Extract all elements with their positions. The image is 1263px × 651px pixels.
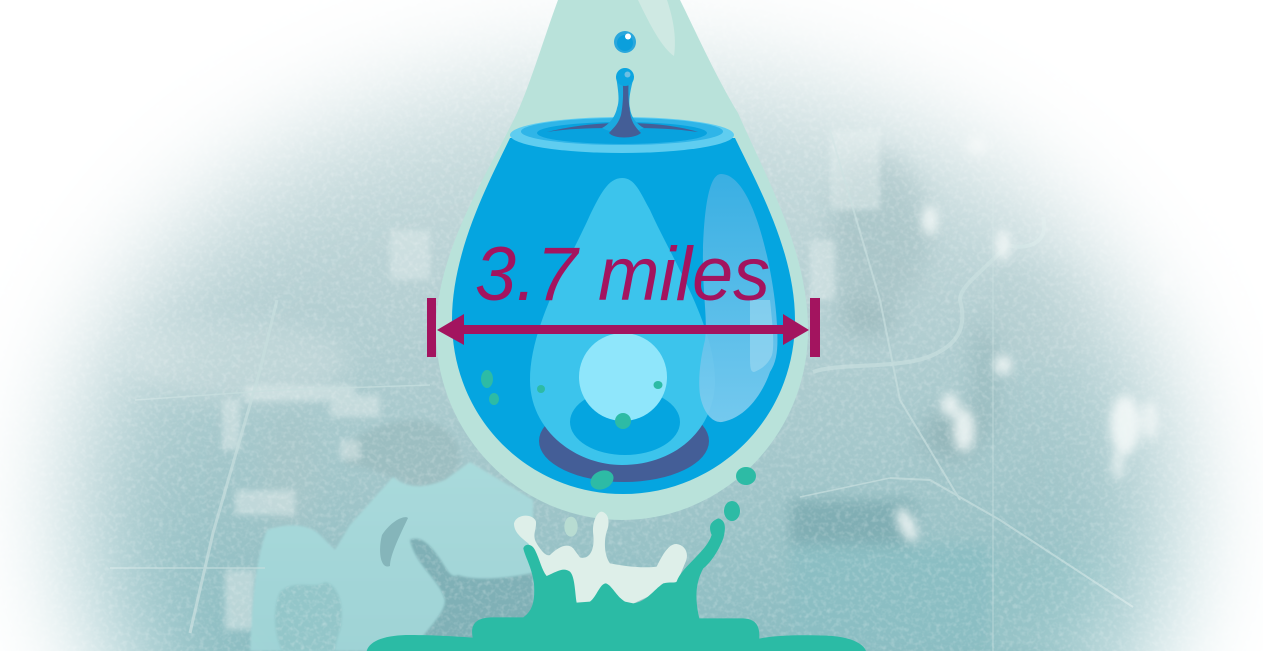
drop inner water body	[452, 138, 795, 494]
droplet	[481, 370, 493, 388]
inner blue ellipse	[570, 389, 680, 455]
droplet	[537, 385, 545, 393]
land lobe	[358, 422, 457, 482]
fields lower right	[786, 496, 1054, 646]
falling droplet inner	[617, 35, 633, 51]
shell highlight	[638, 0, 675, 56]
droplet	[615, 413, 631, 429]
pale droplet	[564, 517, 578, 537]
column head droplet	[616, 68, 634, 86]
left tick	[427, 298, 436, 357]
clouds	[892, 137, 1173, 546]
bay water	[250, 462, 533, 651]
dark shadow ellipse	[539, 400, 709, 482]
falling droplet	[614, 31, 636, 53]
column core	[609, 76, 641, 138]
lid rim	[510, 117, 734, 153]
island	[275, 582, 342, 651]
urban texture	[222, 130, 880, 630]
land tongue	[410, 538, 534, 638]
lid dark crescent	[547, 123, 698, 132]
green pool and crown	[367, 518, 866, 651]
measurement arrow	[427, 298, 820, 357]
column head tint	[624, 72, 630, 78]
river and roads	[110, 130, 1133, 651]
droplet	[587, 467, 617, 493]
right translucent highlight	[699, 174, 777, 422]
droplet	[654, 381, 662, 389]
pale splash back	[514, 512, 687, 607]
water drop	[436, 0, 808, 520]
lid inner	[537, 122, 707, 144]
narrow island	[380, 517, 408, 567]
droplet shine	[625, 34, 631, 40]
droplet	[736, 467, 756, 485]
water column	[602, 76, 644, 132]
light bubble	[579, 333, 667, 421]
inner lighter drop	[530, 178, 715, 465]
lid middle	[521, 118, 723, 145]
green droplets	[481, 370, 756, 521]
distance label: 3.7 miles	[475, 232, 770, 317]
arrow double head	[437, 314, 809, 345]
land texture overlay	[276, 539, 533, 651]
right tick	[810, 298, 820, 357]
drop outer shell	[436, 0, 808, 520]
droplet	[724, 501, 740, 521]
splash	[367, 512, 866, 651]
droplet	[489, 393, 499, 405]
highlight strip	[750, 300, 773, 372]
